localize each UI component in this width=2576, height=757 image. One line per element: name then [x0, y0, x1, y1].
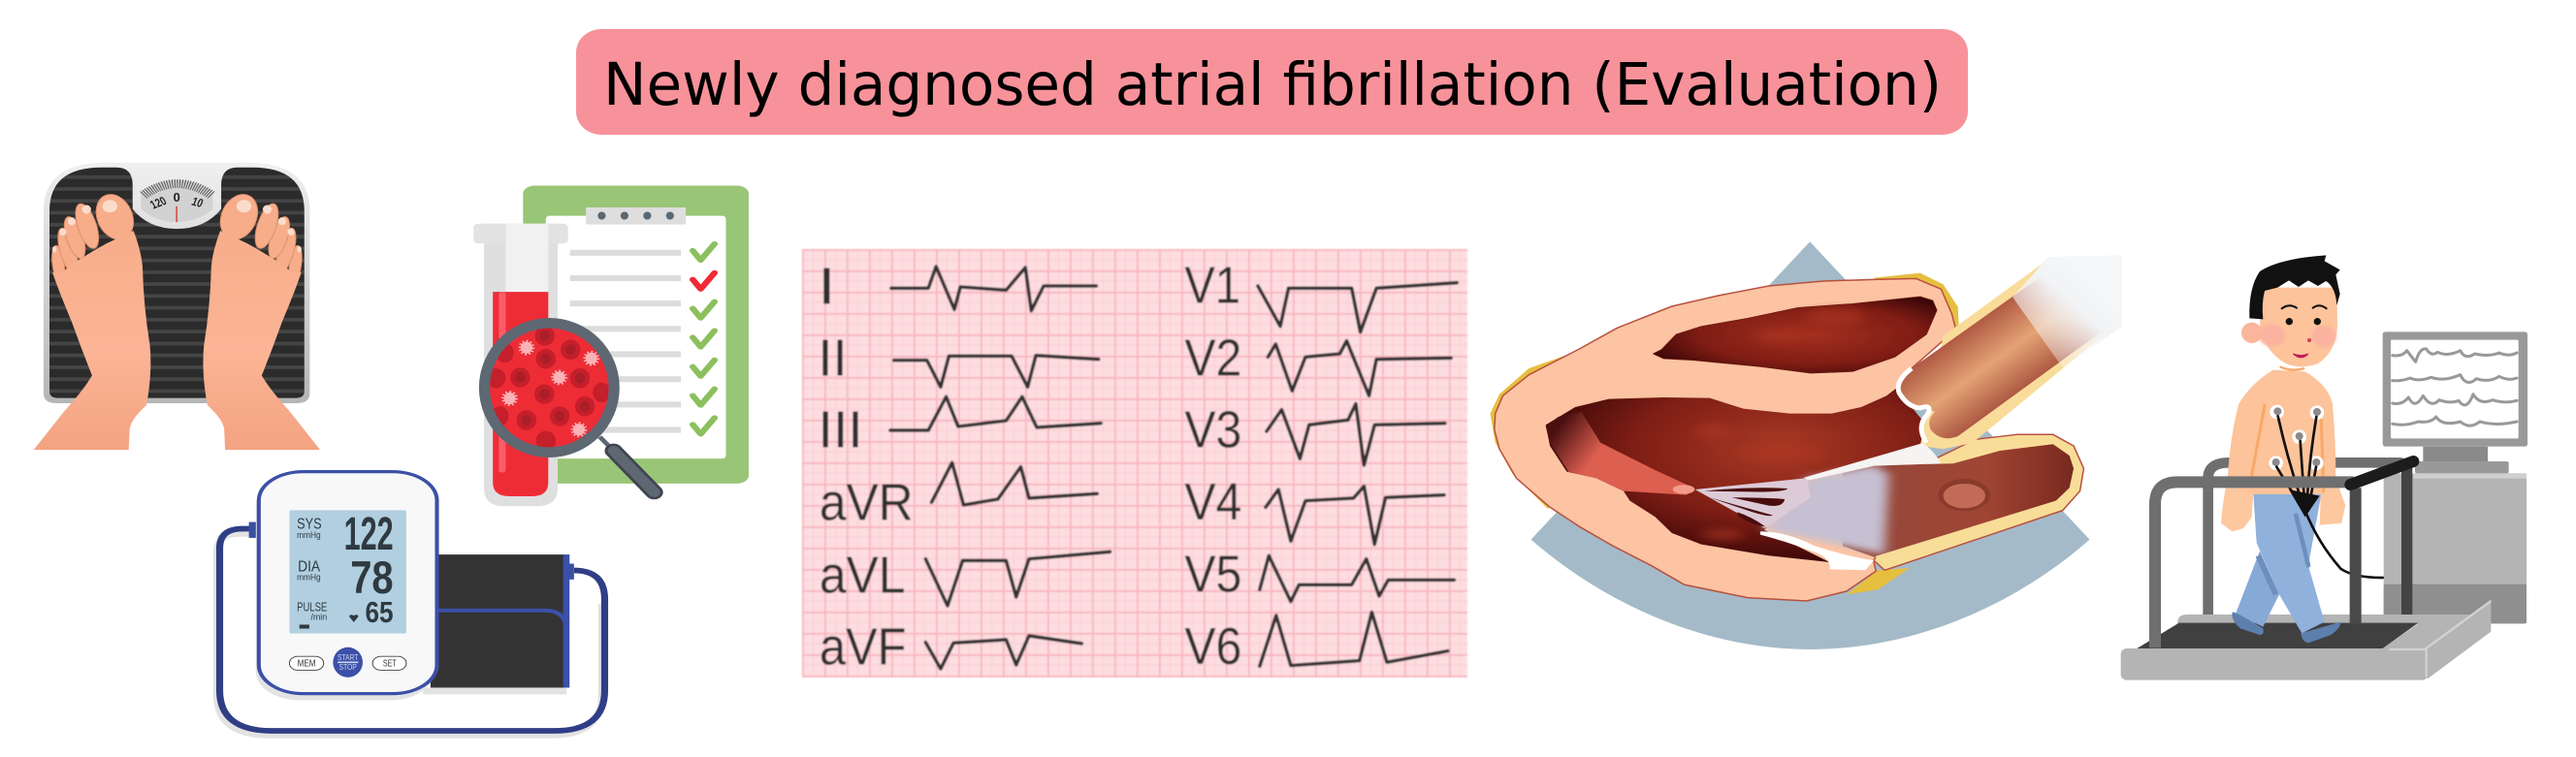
icon: blood pressure monitor: 78 — [350, 552, 394, 604]
icon: man on treadmill stress ECG — [2121, 255, 2528, 680]
icon: blood pressure monitor: DIA — [298, 558, 320, 575]
icon: blood pressure monitor: 122 — [344, 507, 394, 560]
icon: blood pressure monitor: SET — [383, 658, 397, 669]
icon: blood pressure monitor: MEM — [298, 658, 316, 669]
icon: blood pressure monitor: /min — [310, 613, 327, 622]
icon: blood pressure monitor: 65 — [366, 596, 394, 629]
chart: 12-lead ECG: V1 — [1184, 257, 1240, 314]
icon: blood pressure monitor: START — [338, 653, 359, 662]
chart: 12-lead ECG: aVF — [820, 617, 906, 676]
icon: blood test tube, checklist and magnifier — [473, 186, 749, 506]
icon: blood pressure monitor: STOP — [338, 663, 357, 672]
chart: 12-lead ECG: II — [818, 330, 848, 387]
icon: weighing scale with feet: 0 — [174, 191, 180, 205]
title — [576, 29, 1968, 135]
chart: 12-lead ECG: I — [818, 257, 835, 315]
chart: 12-lead ECG: V5 — [1184, 545, 1241, 603]
icon: blood pressure monitor: PULSE — [297, 601, 327, 615]
icon: blood pressure monitor: SYS — [297, 515, 322, 532]
icon: blood pressure monitor — [216, 472, 604, 736]
chart: 12-lead ECG: V6 — [1184, 617, 1241, 675]
chart: 12-lead ECG: V3 — [1184, 401, 1241, 458]
icon: weighing scale with feet: 120 — [147, 194, 169, 211]
chart: 12-lead ECG: aVL — [820, 546, 906, 604]
chart: 12-lead ECG — [802, 249, 1467, 678]
chart: 12-lead ECG: aVR — [820, 474, 914, 531]
icon: echocardiogram heart cross-section — [1490, 241, 2122, 649]
icon: blood pressure monitor: mmHg — [297, 531, 321, 541]
chart: 12-lead ECG: V2 — [1184, 329, 1241, 387]
chart: 12-lead ECG: III — [818, 401, 863, 458]
title: Newly diagnosed atrial fibrillation (Evaluation) — [603, 50, 1942, 119]
icon: weighing scale with feet — [34, 163, 320, 450]
icon: blood pressure monitor: mmHg — [297, 574, 321, 583]
icon: weighing scale with feet: 10 — [190, 194, 206, 210]
chart: 12-lead ECG: V4 — [1184, 473, 1241, 530]
